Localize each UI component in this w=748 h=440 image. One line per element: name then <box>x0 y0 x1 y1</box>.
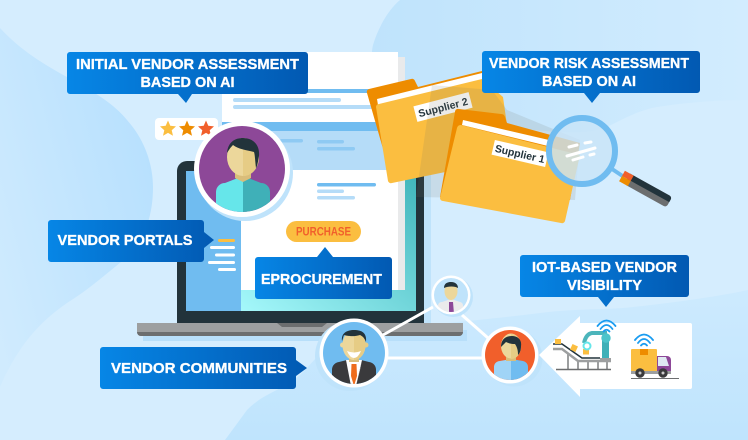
delivery truck <box>631 349 679 378</box>
callout: vendor risk assessment: BASED ON AI <box>542 74 636 90</box>
robot arm <box>584 333 607 343</box>
conveyor robot <box>553 333 611 370</box>
rating stars <box>155 118 218 140</box>
callout: vendor portals <box>48 220 214 262</box>
callout: initial vendor assessment <box>67 52 308 103</box>
magnifying glass <box>549 118 672 207</box>
folder label: Supplier 1 <box>494 143 546 166</box>
callout: iot-based vendor visibility: VISIBILITY <box>567 278 642 294</box>
network connectors <box>383 307 488 358</box>
folder shadow <box>416 85 580 200</box>
IoT white arrow panel <box>539 316 692 397</box>
laptop <box>137 161 467 341</box>
callout: vendor risk assessment <box>482 51 700 103</box>
callout: vendor communities: VENDOR COMMUNITIES <box>111 361 287 377</box>
avatar: vendor woman purple <box>194 121 293 221</box>
callout: vendor risk assessment: VENDOR RISK ASSESSMENT <box>489 56 689 72</box>
callout: initial vendor assessment: BASED ON AI <box>140 75 234 91</box>
avatar: woman orange <box>482 326 542 386</box>
callout: iot-based vendor visibility: IOT-BASED VENDOR <box>532 260 678 276</box>
callout: initial vendor assessment: INITIAL VENDOR ASSESSMENT <box>76 57 299 73</box>
folder: supplier 1 <box>440 109 580 223</box>
purchase button <box>286 221 361 242</box>
callout: eprocurement <box>255 247 392 299</box>
sidebar lines <box>208 239 236 271</box>
callout: vendor communities <box>100 347 307 389</box>
wifi icon: truck <box>635 334 653 346</box>
document pages <box>222 52 405 290</box>
callout: vendor portals: VENDOR PORTALS <box>58 233 193 249</box>
callout: iot-based vendor visibility <box>520 255 689 307</box>
purchase button: PURCHASE <box>296 226 351 238</box>
callout: eprocurement: EPROCUREMENT <box>261 272 382 288</box>
avatar: man suit <box>315 318 388 391</box>
laptop shadow <box>143 330 467 341</box>
folder: supplier 2 <box>367 71 507 183</box>
wifi icon: robot <box>598 320 616 332</box>
avatar: man white shirt <box>432 276 473 317</box>
folder label: Supplier 2 <box>417 96 469 120</box>
